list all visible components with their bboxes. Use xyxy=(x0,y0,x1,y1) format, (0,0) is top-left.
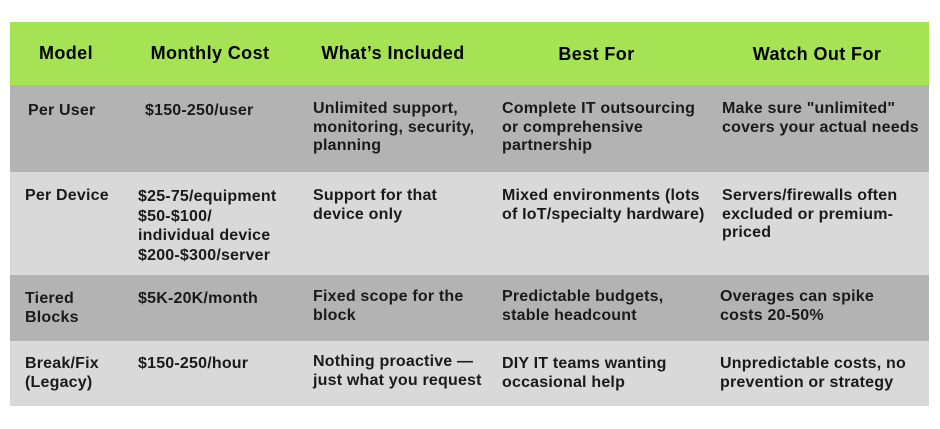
table: Fixed scope for the xyxy=(313,288,464,305)
table: Model xyxy=(39,43,93,63)
row: break/fix xyxy=(10,341,929,406)
table: $5K-20K/month xyxy=(138,290,258,307)
table: of IoT/specialty hardware) xyxy=(502,206,705,222)
table: Nothing proactive — xyxy=(313,353,473,370)
row: tiered blocks xyxy=(10,275,929,341)
row: per device xyxy=(10,172,929,275)
table: Support for that xyxy=(313,187,437,204)
table: $150-250/user xyxy=(145,102,253,119)
table: Overages can spike xyxy=(720,288,874,305)
table: individual device xyxy=(138,227,270,244)
table: What’s Included xyxy=(321,43,465,63)
table: $25-75/equipment xyxy=(138,188,276,205)
table: excluded or premium- xyxy=(722,206,893,222)
table: or comprehensive xyxy=(502,118,643,136)
table: Per User xyxy=(28,102,95,119)
table: costs 20-50% xyxy=(720,306,824,324)
header row xyxy=(10,22,929,85)
table: Unpredictable costs, no xyxy=(720,355,906,372)
table: (Legacy) xyxy=(25,374,92,390)
table: Make sure "unlimited" xyxy=(722,100,895,117)
table: Watch Out For xyxy=(753,44,881,64)
table: stable headcount xyxy=(502,306,637,324)
table: Blocks xyxy=(25,308,79,326)
table: occasional help xyxy=(502,374,625,390)
table: $50-$100/ xyxy=(138,208,212,224)
table: Servers/firewalls often xyxy=(722,187,897,204)
table: Per Device xyxy=(25,187,109,204)
table: planning xyxy=(313,137,381,154)
table: priced xyxy=(722,224,771,241)
table: Break/Fix xyxy=(25,355,99,372)
table: block xyxy=(313,306,356,324)
table: Mixed environments (lots xyxy=(502,187,700,204)
table: Complete IT outsourcing xyxy=(502,100,695,117)
table: Unlimited support, xyxy=(313,100,458,117)
table: prevention or strategy xyxy=(720,374,893,390)
table: just what you request xyxy=(313,372,482,388)
table: covers your actual needs xyxy=(722,118,919,136)
table: Monthly Cost xyxy=(151,43,269,63)
row: per user xyxy=(10,85,929,172)
table: Tiered xyxy=(25,290,74,307)
table: Predictable budgets, xyxy=(502,288,663,305)
table: $200-$300/server xyxy=(138,246,270,264)
table: partnership xyxy=(502,137,592,154)
table: monitoring, security, xyxy=(313,118,474,136)
table: DIY IT teams wanting xyxy=(502,355,667,372)
table: $150-250/hour xyxy=(138,355,248,372)
table: device only xyxy=(313,206,402,222)
table: Best For xyxy=(558,44,635,64)
